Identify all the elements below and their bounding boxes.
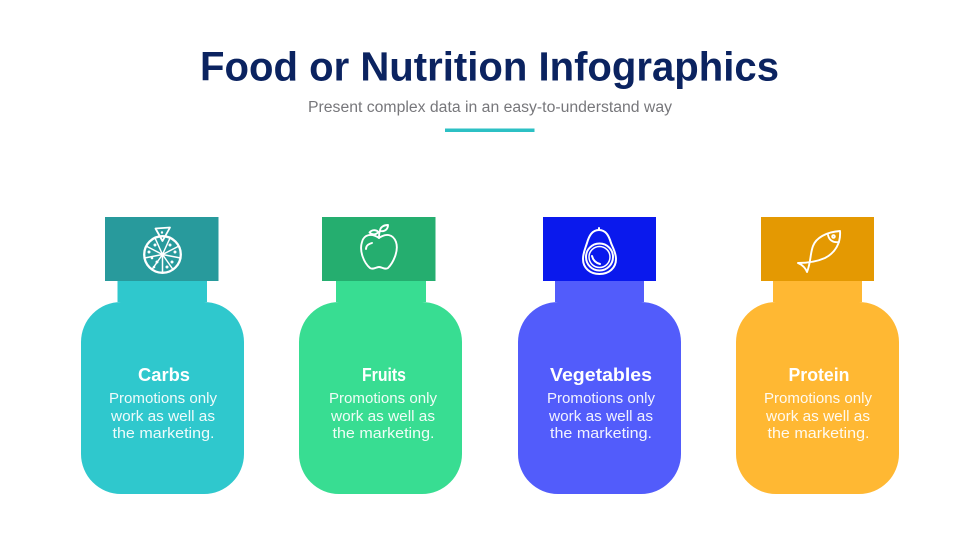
description: carbs: [109, 390, 217, 442]
description: protein: work as well as: [765, 408, 870, 425]
description: fruits: [329, 390, 437, 442]
description: protein: [764, 390, 872, 442]
subtitle: Present complex data in an easy-to-understand way: [308, 99, 672, 116]
description: fruits: the marketing.: [332, 425, 434, 442]
description: carbs: work as well as: [110, 408, 215, 425]
description: carbs: Promotions only: [109, 390, 217, 407]
title: Food or Nutrition Infographics: [200, 44, 779, 90]
description: fruits: work as well as: [330, 408, 435, 425]
cap: fruits: [322, 217, 436, 281]
heading: protein: Protein: [788, 365, 850, 385]
heading: fruits: Fruits: [362, 365, 406, 385]
description: vegetables: Promotions only: [547, 390, 655, 407]
description: protein: Promotions only: [764, 390, 872, 407]
panel: fruits: [299, 217, 462, 494]
bottle body: protein: [736, 281, 899, 494]
heading: carbs: Carbs: [138, 365, 190, 385]
panel: carbs: [81, 217, 244, 494]
description: vegetables: the marketing.: [550, 425, 652, 442]
panel: protein: [736, 217, 899, 494]
description: protein: the marketing.: [768, 425, 870, 442]
title underline: [445, 128, 534, 132]
cap: protein: [761, 217, 874, 281]
icon: avocado: [583, 228, 616, 274]
heading: vegetables: Vegetables: [550, 365, 652, 385]
icon: pizza: [144, 228, 181, 273]
icon: fish: [798, 231, 840, 272]
bottle body: fruits: [299, 281, 462, 494]
description: carbs: the marketing.: [112, 425, 214, 442]
bottle body: vegetables: [518, 281, 681, 494]
icon: apple: [361, 225, 397, 269]
description: fruits: Promotions only: [329, 390, 437, 407]
panel: vegetables: [518, 217, 681, 494]
cap: vegetables: [543, 217, 656, 281]
cap: carbs: [105, 217, 218, 281]
description: vegetables: [547, 390, 655, 442]
bottle body: carbs: [81, 281, 244, 494]
description: vegetables: work as well as: [548, 408, 653, 425]
